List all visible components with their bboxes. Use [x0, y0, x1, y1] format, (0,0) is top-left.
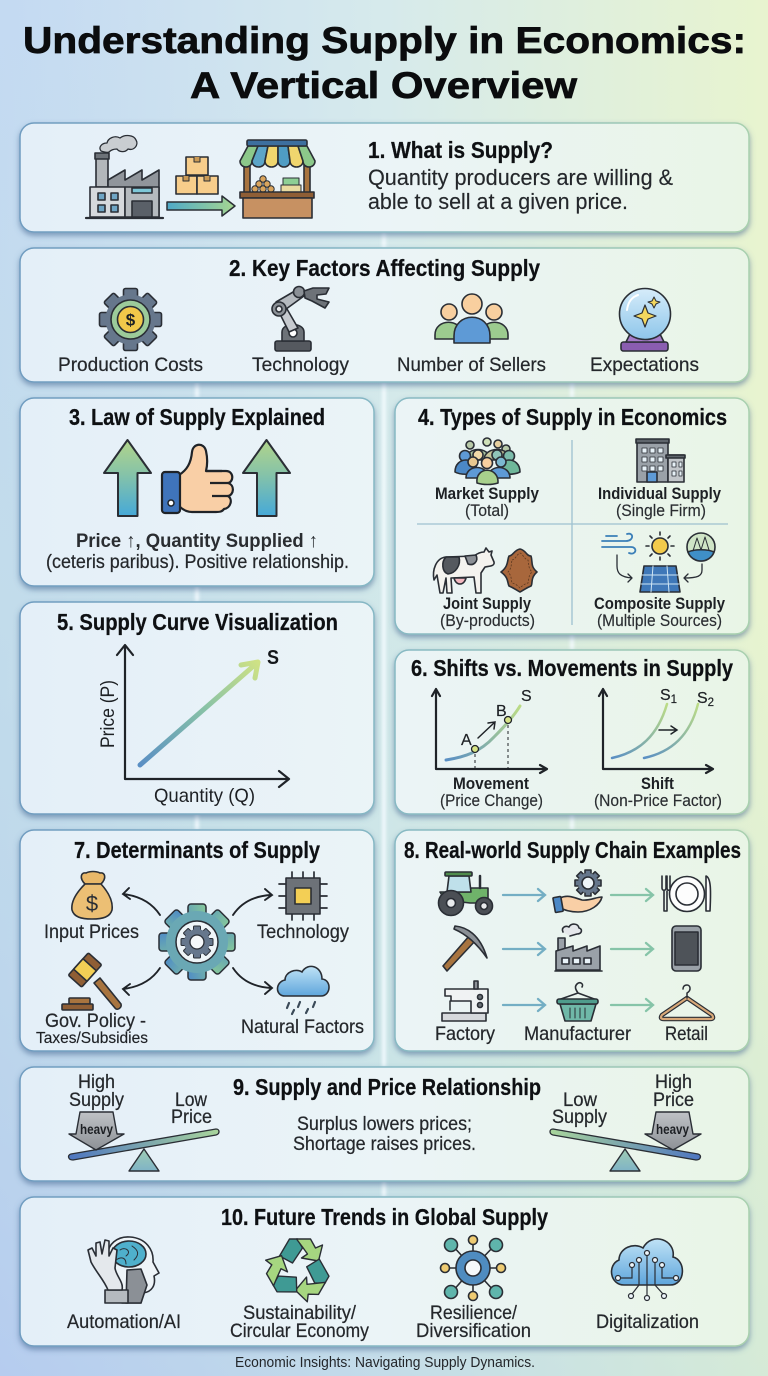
- chart: movement along curve: A: [461, 732, 472, 749]
- chart: movement along curve: (Price Change): [440, 792, 543, 810]
- icon: cost gear: $: [126, 310, 136, 330]
- icon: digital cloud: [612, 1239, 682, 1300]
- icon: tractor: [438, 872, 492, 916]
- panel: 10 future trends: [20, 1197, 749, 1346]
- chain labels: Manufacturer: [524, 1023, 631, 1045]
- icon: factory small: [555, 924, 602, 971]
- description: [368, 165, 673, 214]
- icon: rain cloud: [278, 966, 329, 1014]
- title: [23, 20, 746, 106]
- chain labels: [435, 1023, 708, 1045]
- heading: 5. Supply Curve Visualization: [57, 609, 338, 635]
- seesaw: low supply high price: High: [655, 1071, 692, 1093]
- factor labels: Production Costs: [58, 354, 203, 376]
- chart: supply curve: S: [267, 647, 279, 669]
- icon: factory: [86, 136, 163, 218]
- heading: 4. Types of Supply in Economics: [418, 404, 727, 430]
- factor labels: [58, 354, 699, 376]
- description: able to sell at a given price.: [368, 189, 628, 214]
- panel: 9 supply and price: [20, 1067, 749, 1181]
- icon: boxes: [176, 157, 218, 194]
- seesaw: low supply high price: Price: [653, 1089, 694, 1111]
- law text: [46, 530, 349, 573]
- law text: (ceteris paribus). Positive relationship.: [46, 551, 349, 573]
- icon: recycling symbol: [261, 1239, 334, 1305]
- icon: up arrow right: [243, 440, 290, 516]
- icon: hand with gear: [553, 870, 602, 913]
- icon: sewing machine: [442, 981, 488, 1021]
- footer: Economic Insights: Navigating Supply Dynamics.: [235, 1355, 535, 1371]
- composite supply label: Composite Supply: [594, 595, 726, 613]
- joint supply label: (By-products): [440, 612, 535, 630]
- arrows: chain rows right: [611, 889, 653, 1011]
- trend labels: Circular Economy: [230, 1320, 369, 1342]
- icon: market stall: [240, 140, 315, 218]
- label: gov policy: Gov. Policy -: [45, 1010, 146, 1032]
- icon: people: [435, 294, 508, 343]
- icon: hanger: [661, 985, 713, 1019]
- seesaw: low supply high price: Supply: [552, 1106, 607, 1128]
- heading: 10. Future Trends in Global Supply: [221, 1204, 548, 1230]
- icon: basket: [557, 983, 598, 1021]
- seesaw: high supply low price: [69, 1071, 219, 1171]
- heading: 3. Law of Supply Explained: [69, 404, 325, 430]
- law text: Price ↑, Quantity Supplied ↑: [76, 530, 318, 552]
- trend labels: Sustainability/: [243, 1302, 357, 1324]
- composite supply label: (Multiple Sources): [597, 612, 722, 630]
- seesaw: low supply high price: [550, 1071, 701, 1171]
- label: natural factors: Natural Factors: [241, 1016, 364, 1038]
- icon: AI head: [88, 1237, 159, 1303]
- individual supply label: [598, 485, 722, 520]
- chart: movement along curve: Movement: [453, 775, 529, 793]
- title: A Vertical Overview: [190, 65, 577, 106]
- icon: up arrow left: [104, 440, 151, 516]
- chart: supply curve: [97, 645, 289, 807]
- label: input prices: Input Prices: [44, 921, 139, 943]
- icon: wind: [602, 534, 635, 554]
- arrows: gear to determinants: [123, 888, 272, 995]
- heading: 1. What is Supply?: [368, 137, 553, 163]
- icon: cow: [434, 548, 494, 593]
- factor labels: Technology: [252, 354, 349, 376]
- label: gov policy: Taxes/Subsidies: [36, 1030, 148, 1047]
- trend labels: [67, 1302, 699, 1342]
- chart: movement along curve: B: [496, 703, 507, 720]
- icon: microchip: [279, 872, 327, 920]
- icon: gavel: [62, 953, 121, 1010]
- panel: 2 key factors: [20, 248, 749, 382]
- market supply label: [435, 485, 540, 520]
- panel: 4 types of supply: [395, 398, 749, 634]
- chart: shift of curve: S: [660, 687, 671, 704]
- chart: shift of curve: 1: [671, 694, 677, 706]
- joint supply label: Joint Supply: [443, 595, 532, 613]
- icon: office building: [636, 439, 685, 482]
- icon: solar panel: [640, 566, 680, 592]
- central text: Shortage raises prices.: [293, 1133, 476, 1155]
- icon: thumbs up: [162, 445, 233, 513]
- chart: shift of curve: [594, 687, 722, 810]
- chart: movement along curve: [432, 688, 547, 810]
- chart: supply curve: Quantity (Q): [154, 785, 255, 807]
- panel: 6 shifts vs movements: [395, 650, 749, 814]
- market supply label: (Total): [465, 502, 509, 520]
- icon: cost gear: [100, 288, 162, 350]
- icon: plate and cutlery: [662, 876, 711, 912]
- icon: composite sources: [602, 532, 715, 592]
- panel: 8 supply chain examples: [395, 830, 749, 1051]
- chart: shift of curve: (Non-Price Factor): [594, 792, 722, 810]
- label: gov policy: [36, 1010, 148, 1047]
- icon: pickaxe: [443, 926, 487, 971]
- panel: 1 what is supply: [20, 123, 749, 232]
- individual supply label: Individual Supply: [598, 485, 722, 503]
- icon: central gear: [159, 904, 235, 980]
- arrow: factory to store: [167, 196, 235, 216]
- chart: supply curve: Price (P): [97, 680, 119, 748]
- icon: sun: [646, 532, 674, 560]
- icon: hydro: [687, 533, 715, 561]
- label: technology: Technology: [257, 921, 349, 943]
- heading: 7. Determinants of Supply: [74, 837, 320, 863]
- icon: money bag: $: [86, 891, 98, 916]
- individual supply label: (Single Firm): [616, 502, 706, 520]
- panel: 5 supply curve: [20, 602, 374, 814]
- seesaw: high supply low price: Low: [175, 1089, 208, 1111]
- seesaw: high supply low price: High: [78, 1071, 115, 1093]
- panel: 7 determinants: [20, 830, 374, 1051]
- seesaw: low supply high price: Low: [563, 1089, 598, 1111]
- trend labels: Diversification: [416, 1320, 531, 1342]
- icon: robot arm: [272, 286, 329, 351]
- seesaw: low supply high price: heavy: [656, 1121, 689, 1137]
- chain labels: Factory: [435, 1023, 495, 1045]
- seesaw: high supply low price: Price: [171, 1106, 212, 1128]
- market supply label: Market Supply: [435, 485, 540, 503]
- panel: 3 law of supply: [20, 398, 374, 586]
- icon: crystal ball: [620, 288, 670, 351]
- seesaw: high supply low price: heavy: [80, 1121, 113, 1137]
- arrows: chain rows: [503, 889, 545, 1011]
- chart: movement along curve: S: [521, 688, 532, 705]
- icon: crowd: [455, 438, 520, 484]
- trend labels: Resilience/: [430, 1302, 518, 1324]
- icon: money bag: [72, 872, 112, 919]
- central text: Surplus lowers prices;: [297, 1113, 472, 1135]
- seesaw: high supply low price: Supply: [69, 1089, 124, 1111]
- icon: arrows: [617, 555, 702, 582]
- icon: resilience network: [440, 1236, 506, 1300]
- chart: shift of curve: Shift: [641, 775, 674, 793]
- icon: leather hide: [501, 549, 537, 592]
- icon: smartphone: [672, 926, 701, 971]
- title: Understanding Supply in Economics:: [23, 20, 746, 61]
- chart: shift of curve: 2: [708, 697, 714, 709]
- description: Quantity producers are willing &: [368, 165, 673, 190]
- factor labels: Number of Sellers: [397, 354, 546, 376]
- factor labels: Expectations: [590, 354, 699, 376]
- chain labels: Retail: [665, 1023, 708, 1045]
- heading: 2. Key Factors Affecting Supply: [229, 255, 540, 281]
- heading: 9. Supply and Price Relationship: [233, 1074, 541, 1100]
- joint supply label: [440, 595, 535, 630]
- trend labels: Digitalization: [596, 1311, 699, 1333]
- composite supply label: [594, 595, 726, 630]
- chart: shift of curve: S: [697, 690, 708, 707]
- central text: [293, 1113, 476, 1155]
- trend labels: Automation/AI: [67, 1311, 181, 1333]
